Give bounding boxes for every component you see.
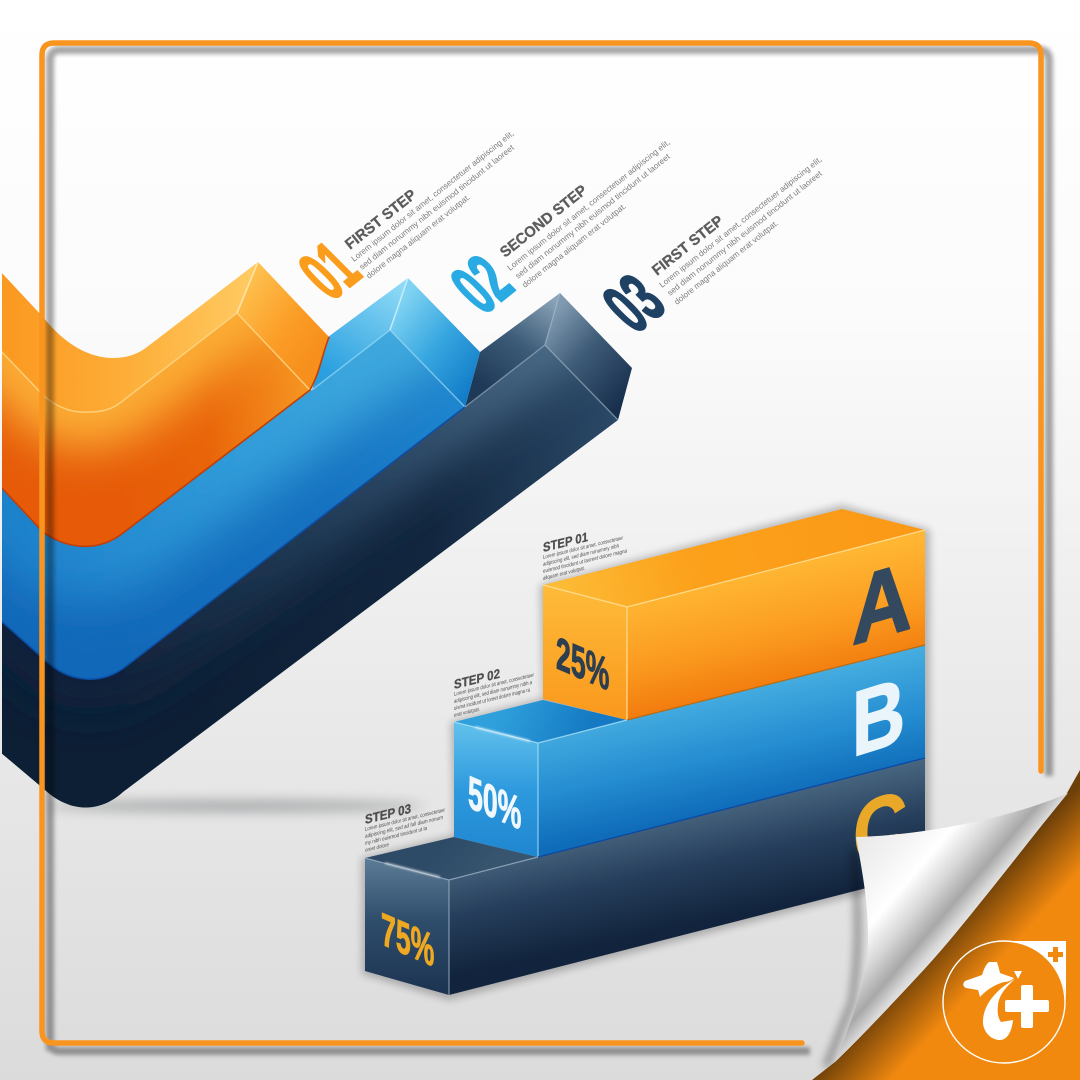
description: dolore magna aliquam erat volutpat. [673,219,780,307]
50 percent: 50% [468,766,521,841]
blue block [454,645,925,857]
blue bar [2,278,480,680]
heading: FIRST STEP [649,212,727,279]
page curl [812,770,1080,1080]
step 03 callout [587,155,824,347]
heading: STEP 02 [454,666,500,692]
description: sed diam nonummy nibh euismod tincidunt ut laoreet [358,143,516,272]
arrow tip [1014,971,1022,979]
description: Lorem ipsum dolor sit amet, consectetuer [454,672,534,698]
number 03: 03 [587,260,680,347]
description: dolore magna aliquam erat volutpat. [365,193,472,281]
description: adipiscing elit, sed ad full diam nonum [365,815,443,840]
step 02 label [454,658,534,719]
description: Lorem ipsum dolor sit amet, consectetuer adipiscing elit, [658,155,824,290]
number 01: 01 [283,228,376,314]
description [365,807,445,854]
revealed orange corner [812,770,1080,1080]
letter C: C [853,770,907,889]
letter B: B [852,657,905,777]
description: aliquam erat volutpat. [543,566,585,582]
large plus [1004,984,1050,1029]
folded paper [835,793,1068,1062]
t mark top [963,962,1014,997]
number 02: 02 [435,241,528,328]
stair blocks [365,509,925,995]
description [543,534,628,582]
letter A: A [852,542,912,666]
description: sed diam nonummy nibh euismod tincidunt ut laoreet [514,152,672,281]
description: adipiscing elit, sed diam nonummy nibh a [454,680,533,705]
25 percent: 25% [556,627,609,702]
navy block [365,758,925,995]
description: Lorem ipsum dolor sit amet, consectetuer [543,535,623,561]
logo corner [1004,941,1066,1002]
step 02 callout [435,138,672,328]
description: adipiscing elit, sed diam nonummy nibh [543,543,619,568]
step 01 callout [283,129,516,314]
logo ring [943,941,1065,1063]
stair blocks shadow [362,505,930,1000]
t stem [983,979,1015,1040]
curl shadow [822,850,862,1068]
3D L-shaped bars [2,262,632,808]
navy bar [2,292,632,808]
heading: SECOND STEP [497,182,590,261]
heading: STEP 01 [543,529,588,555]
heading: STEP 03 [365,801,411,827]
description: oreet dolore [365,842,389,854]
step 01 label [543,519,628,582]
description: erat volutpat. [454,707,480,719]
description: Lorem ipsum dolor sit amet, consectetuer adipiscing elit, [350,129,516,264]
orange bar [2,262,330,548]
description: uisma incidunt ut loreet dolore magna ra [454,687,531,712]
description: sed diam nonummy nibh euismod tincidunt ut laoreet [666,169,824,298]
75 percent: 75% [381,903,434,978]
description: my nibh euismod tincidunt ut la [365,826,428,847]
description: dolore magna aliquam erat volutpat. [521,202,628,290]
floor shadow under bars [45,800,425,812]
step 03 label [365,793,445,854]
small plus [1048,947,1063,962]
description: euismod tincidunt ut laoreet dolore magna [543,548,628,575]
logo [943,941,1066,1063]
heading: FIRST STEP [342,186,420,253]
description: Lorem ipsum dolor sit amet, consectetuer [365,807,445,833]
description [454,672,534,719]
orange block [543,509,925,720]
description: Lorem ipsum dolor sit amet, consectetuer adipiscing elit, [506,138,672,273]
